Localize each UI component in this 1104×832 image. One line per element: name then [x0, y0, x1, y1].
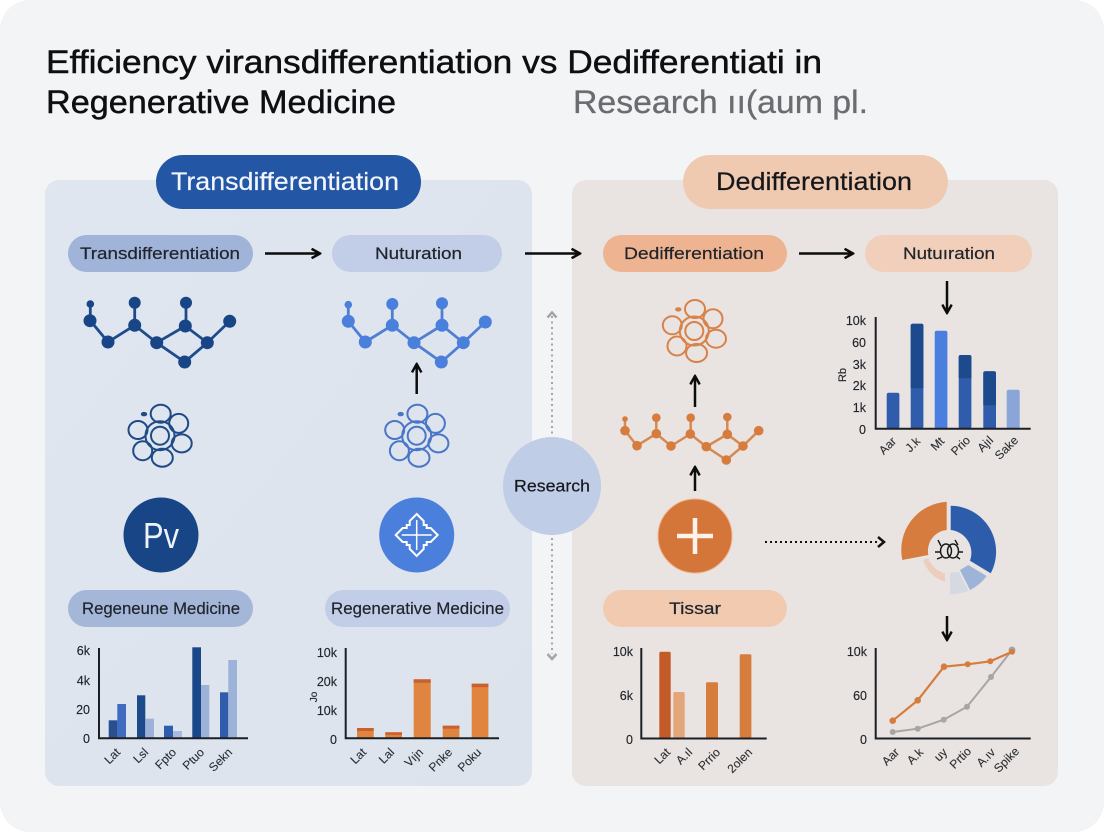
- pill: Nuturation: Nuturation: [375, 244, 462, 263]
- chart: stacked blue bars top right: 10k: [846, 314, 867, 328]
- heading: Dedifferentiation: Dedifferentiation: [716, 168, 912, 196]
- chart: orange bars with dark caps: 10k: [317, 646, 338, 660]
- chart: orange bars with dark caps: 0: [330, 733, 337, 747]
- chart: orange bars bottom: Prrio: [695, 745, 723, 773]
- arrow: dotted plus to donut: [765, 537, 884, 547]
- pill: Dedifferentiation: [603, 235, 787, 272]
- icon: Pv circle: Pv: [143, 515, 179, 556]
- chart: orange bars with dark caps: 10k: [317, 704, 338, 718]
- pill: Nutuiration: Nutuıration: [903, 244, 995, 263]
- arrow: up to blue molecule: [415, 364, 418, 394]
- connector: vertical dotted research axis: [548, 312, 556, 659]
- chart: blue grouped bars: [76, 644, 248, 774]
- chart: stacked blue bars top right: [837, 314, 1031, 462]
- heading: Dedifferentiation: [683, 155, 948, 209]
- chart: line chart: 60: [853, 689, 867, 703]
- pill: Regeneune Medicine: Regeneune Medicine: [82, 599, 240, 618]
- icon: cross badge: [379, 498, 454, 572]
- chart: stacked blue bars top right: 3k: [853, 358, 867, 372]
- chart: stacked blue bars top right: J.k: [902, 434, 924, 455]
- chart: orange bars bottom: A.ıl: [673, 745, 695, 767]
- pill: Transdifferentiation: Transdifferentiation: [80, 244, 240, 263]
- chart: blue grouped bars: 6k: [77, 644, 91, 658]
- panel: dedifferentiation background: [572, 180, 1058, 786]
- icon: mid blue cell cluster: [385, 405, 448, 467]
- chart: orange bars bottom: 0: [626, 733, 633, 747]
- chart: donut: [901, 502, 996, 594]
- icon: mid blue molecule: [342, 297, 492, 368]
- arrow: up to orange molecule: [694, 467, 696, 491]
- title: Efficiency viransdifferentiation vs Dedifferentiati in: [46, 44, 822, 80]
- chart: orange bars with dark caps: Jo: [309, 691, 320, 702]
- arrow: nutuiration down to bar chart: [946, 281, 948, 313]
- chart: line chart: uy: [931, 745, 950, 764]
- arrow: nuturation to dedifferentiation: [525, 252, 580, 255]
- icon: dark blue cell cluster: [128, 405, 192, 467]
- chart: stacked blue bars top right: Aar: [876, 434, 899, 457]
- panel: transdifferentiation background: [45, 180, 532, 786]
- pill: Transdifferentiation: [68, 235, 253, 272]
- chart: orange bars bottom: Lat: [651, 745, 674, 767]
- chart: orange bars with dark caps: Pnke: [426, 745, 455, 774]
- chart: blue grouped bars: Lsl: [130, 745, 151, 766]
- chart: line chart: 0: [860, 733, 867, 747]
- icon: dark blue molecule: [84, 297, 236, 368]
- chart: orange bars bottom: [613, 645, 767, 776]
- chart: blue grouped bars: Ptuo: [180, 745, 207, 773]
- chart: line chart: Prtio: [947, 744, 974, 772]
- chart: orange bars bottom: 6k: [620, 689, 634, 703]
- chart: stacked blue bars top right: 60: [852, 336, 866, 350]
- chart: stacked blue bars top right: 1k: [853, 401, 867, 415]
- chart: blue grouped bars: Sekn: [206, 745, 235, 774]
- node: Research: Research: [514, 476, 590, 496]
- pill: Tissar: Tissar: [669, 599, 721, 618]
- chart: orange bars with dark caps: Poku: [455, 745, 484, 774]
- chart: stacked blue bars top right: Ajıl: [974, 433, 996, 455]
- chart: blue grouped bars: Fpto: [152, 745, 179, 772]
- heading: Transdifferentiation: Transdifferentiation: [171, 168, 399, 196]
- chart: orange bars bottom: 2olen: [724, 745, 755, 776]
- node: Research: [503, 437, 601, 535]
- chart: blue grouped bars: 20: [76, 703, 90, 717]
- pill: Nutuiration: [865, 235, 1032, 272]
- pill: Regenerative Medicine: [325, 590, 510, 627]
- pill: Regeneune Medicine: [68, 590, 253, 627]
- arrow: up to orange cell cluster: [694, 376, 696, 407]
- title: Regenerative Medicine: [46, 84, 396, 120]
- icon: plus circle: [658, 499, 732, 573]
- chart: blue grouped bars: Lat: [101, 745, 124, 767]
- arrow: dedifferentiation to nutuiration: [799, 252, 853, 255]
- chart: stacked blue bars top right: Rb: [837, 368, 849, 382]
- chart: line chart: A.k: [904, 745, 927, 767]
- heading: Transdifferentiation: [156, 155, 421, 209]
- chart: stacked blue bars top right: 0: [859, 423, 866, 437]
- icon: orange cell cluster: [663, 300, 726, 362]
- icon: donut center glyph: [935, 540, 963, 559]
- title: [46, 44, 822, 120]
- chart: orange bars with dark caps: Vıjn: [402, 745, 426, 770]
- chart: blue grouped bars: 4k: [77, 674, 91, 688]
- pill: Regenerative Medicine: Regenerative Medicine: [331, 599, 504, 618]
- chart: orange bars bottom: 10k: [613, 645, 634, 659]
- chart: orange bars with dark caps: Lat: [347, 745, 370, 767]
- pill: Dedifferentiation: Dedifferentiation: [624, 244, 764, 263]
- chart: stacked blue bars top right: Prio: [948, 433, 973, 458]
- chart: line chart: A.ıv: [974, 745, 998, 770]
- chart: stacked blue bars top right: Sake: [992, 433, 1021, 462]
- chart: line chart: Spike: [991, 744, 1022, 775]
- arrow: transdifferentiation to nuturation: [265, 252, 320, 255]
- arrow: donut down to line chart: [946, 616, 948, 640]
- chart: orange bars with dark caps: [309, 646, 499, 774]
- chart: line chart: [847, 645, 1031, 775]
- chart: line chart: 10k: [847, 645, 868, 659]
- subtitle: Research ıı(aum pl.: [573, 84, 868, 120]
- chart: orange bars with dark caps: 20k: [317, 675, 338, 689]
- chart: blue grouped bars: 0: [83, 732, 90, 746]
- icon: Pv circle: [124, 498, 198, 572]
- chart: orange bars with dark caps: Lal: [376, 745, 397, 766]
- chart: stacked blue bars top right: 2k: [853, 379, 867, 393]
- icon: orange molecule: [620, 413, 764, 465]
- chart: stacked blue bars top right: Mt: [928, 434, 948, 454]
- pill: Nuturation: [332, 235, 502, 272]
- pill: Tissar: [603, 590, 787, 627]
- chart: line chart: Aar: [879, 745, 902, 768]
